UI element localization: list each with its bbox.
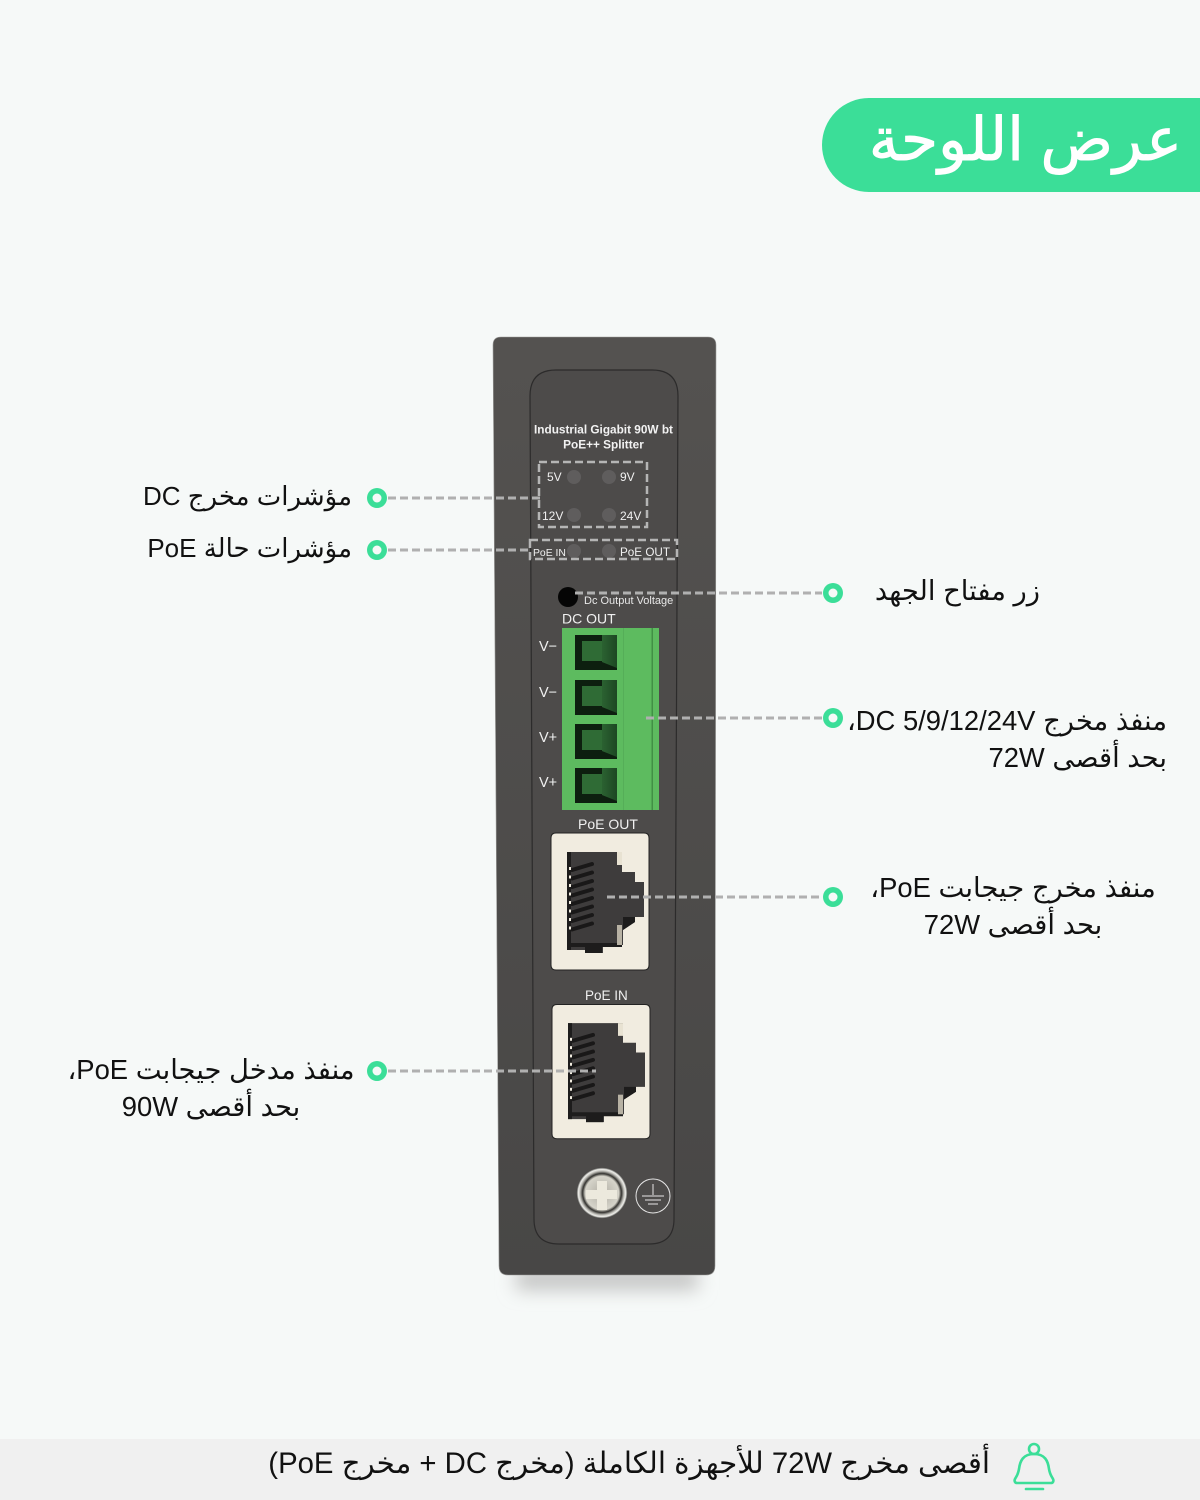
terminal labels: V− [539, 685, 557, 701]
label: PoE in [67, 1054, 355, 1122]
label: DC out: بحد أقصى 72W [988, 742, 1167, 773]
label: PoE out: بحد أقصى 72W [924, 909, 1102, 940]
product name: Industrial Gigabit 90W bt [534, 422, 673, 436]
ground screw [576, 1168, 628, 1218]
leader line: PoE out [607, 887, 843, 907]
device shadow [516, 1268, 698, 1290]
terminal labels: V+ [539, 775, 557, 791]
LED labels: 5V [547, 470, 562, 484]
DC OUT label: DC OUT [562, 610, 616, 626]
leader line: PoE in [367, 1061, 596, 1081]
leader line: voltage button [575, 583, 843, 603]
label: PoE in: منفذ مدخل جيجابت PoE، [67, 1054, 355, 1085]
DC indicators dashed box [539, 462, 647, 527]
voltage label: Dc Output Voltage [584, 595, 673, 607]
icon: bell [1015, 1444, 1053, 1489]
leader line: PoE indicators [367, 540, 530, 560]
label: PoE indicators: مؤشرات حالة PoE [147, 533, 352, 563]
label: PoE in: بحد أقصى 90W [122, 1091, 300, 1122]
title: عرض اللوحة [869, 106, 1182, 173]
device body [493, 337, 716, 1275]
label: DC out [847, 705, 1167, 773]
LED labels: 24V [620, 509, 641, 523]
label: DC out: منفذ مخرج DC 5/9/12/24V، [847, 705, 1167, 736]
label: PoE out: منفذ مخرج جيجابت PoE، [870, 872, 1156, 903]
voltage button [558, 587, 578, 607]
product name: PoE++ Splitter [563, 438, 644, 452]
title pill [822, 98, 1200, 192]
product name [534, 422, 673, 452]
PoE OUT label: PoE OUT [578, 816, 638, 832]
leader line: DC out [646, 708, 843, 728]
green terminal block [562, 628, 659, 810]
LED labels: 9V [620, 470, 635, 484]
label: PoE out [870, 872, 1156, 940]
inner panel [530, 370, 678, 1244]
terminal labels: V+ [539, 730, 557, 746]
footer note: أقصى مخرج 72W للأجهزة الكاملة (مخرج DC + مخرج PoE) [268, 1447, 990, 1480]
LED labels [533, 470, 670, 559]
ground symbol [636, 1179, 670, 1213]
terminal labels: V− [539, 639, 557, 655]
footer bar [0, 1439, 1200, 1500]
LED labels: 12V [542, 509, 563, 523]
label: DC indicators: مؤشرات مخرج DC [143, 481, 352, 511]
leader line: DC indicators [367, 488, 540, 508]
PoE IN label: PoE IN [585, 988, 628, 1003]
LED labels: PoE OUT [620, 546, 670, 559]
PoE IN port [552, 1004, 650, 1139]
PoE OUT port [551, 833, 649, 970]
label: voltage button: زر مفتاح الجهد [875, 575, 1040, 606]
indicator LEDs [567, 470, 616, 558]
terminal labels [539, 639, 557, 791]
LED labels: PoE IN [533, 548, 566, 559]
PoE indicators dashed box [530, 540, 677, 559]
